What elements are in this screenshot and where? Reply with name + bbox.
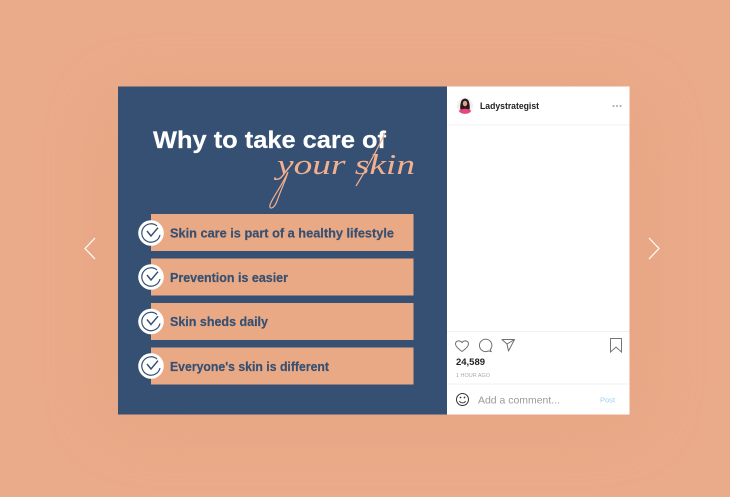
script subheading: your skin (273, 149, 415, 181)
list item 3 (138, 303, 413, 340)
likes count: 24,589 (456, 357, 485, 367)
arrow: previous (85, 238, 95, 259)
arrow: next (649, 238, 659, 259)
icon: check (138, 309, 164, 334)
panel: instagram sidebar (447, 86, 630, 414)
icon: check (138, 264, 164, 290)
icon: check (138, 220, 164, 246)
script subheading (270, 133, 415, 208)
list item 1 (138, 214, 413, 251)
list item 2 (138, 258, 413, 296)
username: Ladystrategist (480, 101, 539, 111)
icon: heart (456, 341, 468, 352)
panel: slide (118, 86, 447, 414)
comment input: Add a comment... (478, 394, 560, 406)
list item 1: Skin care is part of a healthy lifestyle (170, 226, 394, 240)
timestamp: 1 HOUR AGO (456, 373, 490, 379)
avatar (457, 98, 473, 114)
icon: smiley (456, 394, 468, 406)
icon: more options (612, 105, 622, 107)
list item 4: Everyone's skin is different (170, 360, 330, 374)
icon: comment (479, 339, 492, 352)
icon: bookmark (610, 338, 622, 352)
list item 4 (138, 348, 413, 384)
icon: check (138, 353, 164, 379)
post button: Post (600, 396, 616, 404)
list item 2: Prevention is easier (170, 271, 288, 285)
icon: share (502, 340, 514, 351)
heading: Why to take care of (153, 127, 387, 154)
list item 3: Skin sheds daily (170, 315, 268, 329)
